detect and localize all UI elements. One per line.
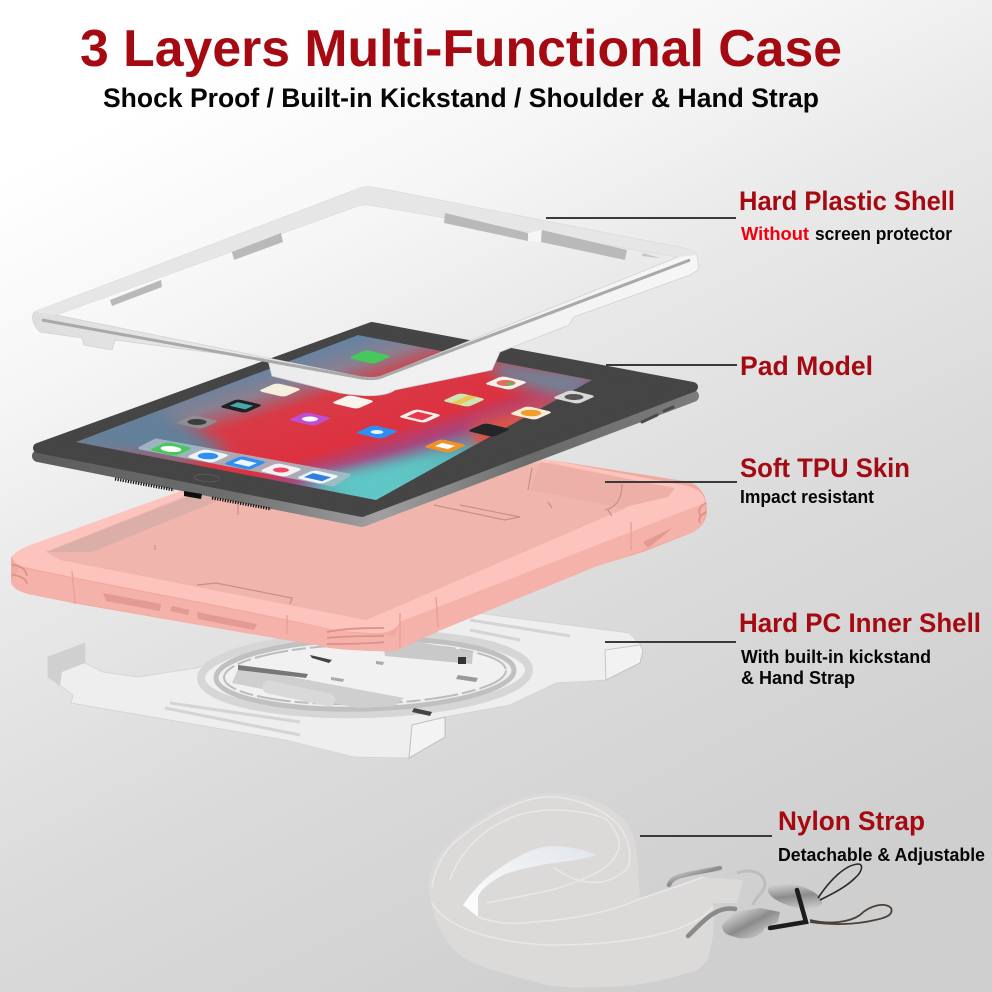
small marks: [310, 655, 478, 716]
note line two: & Hand Strap: [741, 668, 855, 688]
frame inner lower edge: [42, 260, 690, 379]
folded left tab: [48, 643, 85, 686]
upper clasp: [765, 878, 825, 914]
icon: Reminders: [331, 395, 375, 409]
tablet front bezel: [38, 327, 693, 512]
note line one: With built-in kickstand: [741, 647, 931, 667]
speaker slots: [103, 528, 672, 630]
strap band: [428, 793, 743, 987]
soft TPU skin illustration: [11, 448, 707, 651]
icon: Maps: [442, 393, 486, 407]
callout: hard PC inner shell: [605, 608, 981, 688]
icon: Files: [296, 470, 340, 484]
cords: [770, 864, 892, 928]
frame body: [33, 187, 698, 396]
charging port: [184, 491, 202, 499]
icon: iTunes Store: [288, 412, 332, 426]
icon: App Store: [355, 425, 399, 439]
note: Impact resistant: [740, 487, 874, 507]
icon: Music: [259, 463, 303, 477]
leader line: [606, 364, 737, 366]
heading: Soft TPU Skin: [740, 453, 910, 483]
folded right tab: [409, 717, 445, 758]
note: Detachable & Adjustable: [778, 845, 985, 865]
plate rails: [165, 620, 570, 735]
icon: Books: [423, 439, 467, 453]
callout: hard plastic shell: [546, 186, 955, 244]
icon: Photos: [484, 376, 528, 390]
seam lines: [72, 522, 631, 648]
right side fold: [605, 645, 643, 680]
skin outer wall: [11, 460, 707, 651]
hard PC inner shell illustration: [48, 613, 643, 758]
callout: nylon strap: [640, 806, 985, 865]
rotating ring inner: [215, 635, 515, 713]
icon: Mail: [223, 456, 267, 470]
home button: [194, 474, 220, 482]
front wall shading: [11, 503, 705, 651]
strap illustration: [428, 793, 892, 987]
inner right wall: [530, 462, 675, 508]
corner grooves: [12, 503, 706, 644]
heading: Pad Model: [740, 351, 873, 381]
strap holder slot: [232, 667, 404, 708]
hard plastic shell illustration: [33, 187, 698, 396]
screen: [60, 335, 600, 505]
skin rim: [12, 448, 705, 633]
wallpaper: [76, 335, 592, 500]
inner ring detail: [223, 640, 507, 708]
icon: Home: [509, 406, 553, 420]
app icons: [140, 350, 596, 485]
title: 3 Layers Multi-Functional Case: [80, 20, 842, 78]
left speaker: [115, 479, 174, 490]
heading: Hard Plastic Shell: [739, 186, 955, 216]
right speaker: [212, 498, 271, 509]
skin floor: [46, 463, 672, 620]
icon: Camera: [552, 390, 596, 404]
subtitle: Shock Proof / Built-in Kickstand / Shoulder & Hand Strap: [103, 83, 819, 113]
heading: Hard PC Inner Shell: [739, 608, 981, 638]
icon: Stocks: [467, 423, 511, 437]
rotating ring outer: [200, 630, 530, 718]
callout: soft TPU skin: [605, 453, 910, 507]
clip tabs: [110, 213, 660, 306]
icon: Notes: [258, 383, 302, 397]
leader line: [605, 481, 737, 483]
icon: Safari: [186, 449, 230, 463]
heading: Nylon Strap: [778, 806, 925, 836]
kickstand lines: [155, 468, 622, 604]
frame top surface far edges: [34, 187, 697, 315]
hinge hole: [458, 657, 466, 664]
upper hinge: [383, 640, 473, 664]
icon: FaceTime: [348, 350, 392, 364]
icon: Messages: [149, 442, 193, 456]
wallpaper teal: [300, 450, 460, 505]
lower clasp: [722, 908, 780, 939]
note: screen protector: [815, 224, 952, 244]
wallpaper left corner: [60, 405, 230, 462]
icon: Settings: [175, 415, 219, 429]
leader line: [640, 835, 772, 837]
side buttons: [642, 407, 673, 422]
slot shadow: [238, 665, 308, 678]
pad model illustration: [38, 327, 693, 521]
strap hole: [463, 846, 597, 917]
note highlight: Without: [741, 224, 809, 244]
icon: News: [398, 409, 442, 423]
lower buckle: [688, 908, 735, 936]
wallpaper right corner: [490, 360, 600, 400]
upper hook: [737, 871, 765, 905]
tablet side: [38, 335, 693, 521]
icon: TV: [219, 399, 263, 413]
strap stitching: [432, 797, 713, 945]
tab notch: [528, 230, 541, 242]
plate body: [48, 613, 643, 758]
dock: [140, 440, 349, 485]
leader line: [546, 217, 736, 219]
upper buckle: [669, 868, 720, 885]
lower hinge: [261, 679, 336, 708]
wallpaper orange glow: [464, 391, 564, 450]
leader line: [605, 641, 736, 643]
inner left wall: [46, 478, 235, 552]
